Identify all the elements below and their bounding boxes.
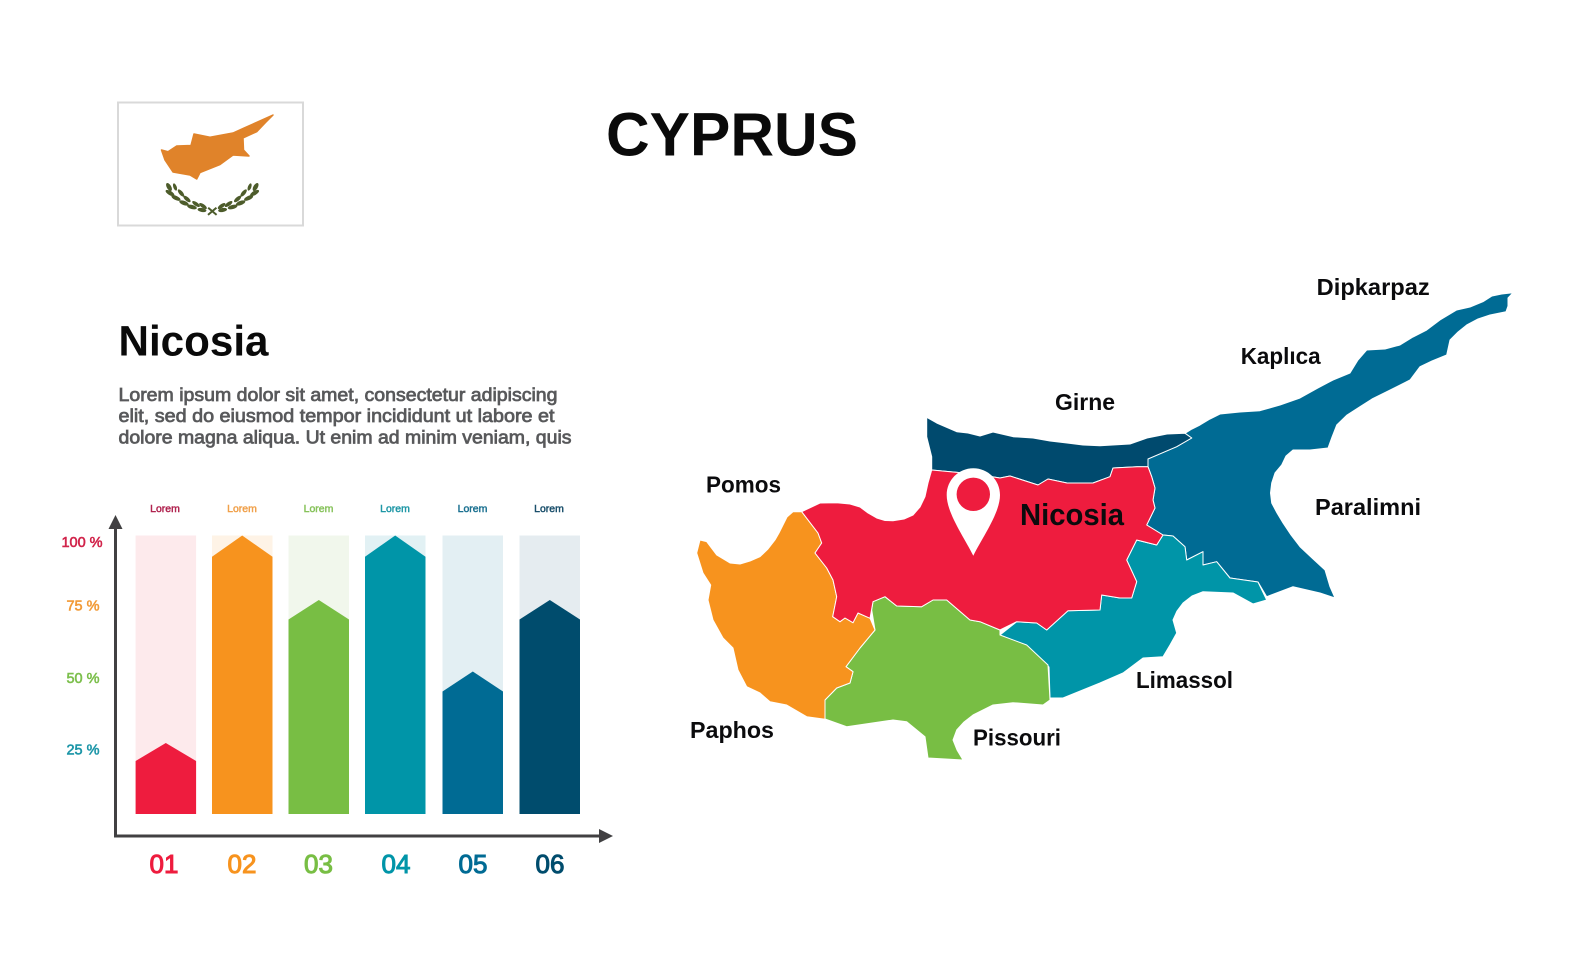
bar 01 <box>136 536 196 814</box>
bar 02 <box>212 536 272 814</box>
column numbers: 05 <box>459 849 487 879</box>
region: Limassol <box>1000 535 1267 698</box>
map labels <box>690 274 1430 750</box>
map labels: Girne <box>1055 389 1115 415</box>
description text: Lorem ipsum dolor sit amet, consectetur adipiscing <box>118 384 558 405</box>
column numbers: 06 <box>536 849 564 879</box>
column captions: Lorem <box>534 503 564 515</box>
region: Pissouri <box>825 597 1050 760</box>
column captions <box>150 503 564 515</box>
bar 05 <box>442 536 503 814</box>
column numbers: 02 <box>228 849 256 879</box>
icon: location pin <box>947 468 1000 556</box>
map of Cyprus <box>697 293 1513 760</box>
percentage axis labels: 100 % <box>61 535 103 551</box>
column numbers <box>150 849 564 879</box>
percentage axis labels: 50 % <box>66 671 100 687</box>
map labels: Dipkarpaz <box>1317 274 1430 300</box>
description text: dolore magna aliqua. Ut enim ad minim veniam, quis <box>118 426 572 448</box>
map labels: Paphos <box>690 717 774 743</box>
column captions: Lorem <box>380 503 410 515</box>
column numbers: 04 <box>382 849 410 879</box>
map labels: Paralimni <box>1315 494 1421 520</box>
map labels: Pomos <box>706 472 781 498</box>
column captions: Lorem <box>458 503 488 515</box>
column captions: Lorem <box>227 503 257 515</box>
bar 06 <box>520 536 580 814</box>
description text: elit, sed do eiusmod tempor incididunt ut labore et <box>118 405 554 426</box>
bar chart <box>61 503 613 879</box>
region: Girne <box>927 417 1192 485</box>
percentage axis labels: 75 % <box>66 598 100 614</box>
column numbers: 01 <box>150 849 178 879</box>
chart axes <box>108 515 613 843</box>
percentage axis labels: 25 % <box>66 742 100 758</box>
description text <box>118 384 572 448</box>
map labels: Kaplıca <box>1241 343 1321 369</box>
column captions: Lorem <box>150 503 180 515</box>
column captions: Lorem <box>304 503 334 515</box>
region: Dipkarpaz, Kaplica, Paralimni <box>1147 293 1513 598</box>
map labels: Limassol <box>1136 667 1233 693</box>
column numbers: 03 <box>304 849 333 879</box>
region: Paphos <box>697 512 875 719</box>
heading: Nicosia: Nicosia <box>118 318 270 366</box>
map labels: Nicosia <box>1020 497 1125 532</box>
flag of Cyprus <box>118 102 303 226</box>
bar 04 <box>365 536 426 814</box>
map labels: Pissouri <box>973 724 1061 750</box>
region: Nicosia <box>802 467 1163 630</box>
title: CYPRUS <box>606 100 858 168</box>
percentage axis labels <box>61 535 103 758</box>
bar 03 <box>288 536 349 814</box>
